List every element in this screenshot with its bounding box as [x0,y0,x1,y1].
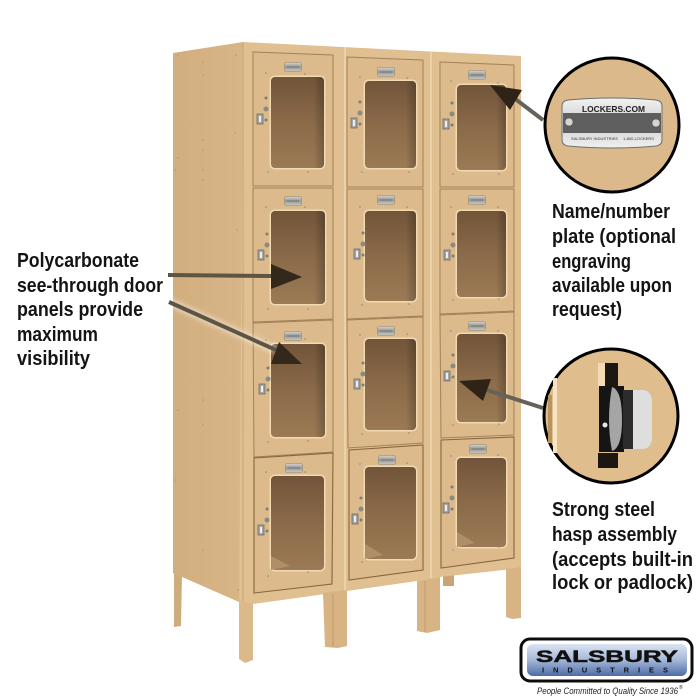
door 3-3 [440,312,514,438]
name plate detail: LOCKERS.COM [582,104,645,114]
locker unit [173,42,521,663]
logo: Salsbury Industries: SALSBURY [536,647,679,666]
column 2 doors [347,57,423,580]
door 1-4 [254,453,333,593]
arrow: door panel lower [169,302,302,364]
front frame [239,42,521,604]
text: polycarbonate panels: Polycarbonate [17,249,139,272]
text: name plate: plate (optional [552,225,676,248]
hasp detail [598,363,652,468]
logo: Salsbury Industries [521,639,692,697]
text: polycarbonate panels: visibility [17,347,91,370]
text: polycarbonate panels [17,249,163,370]
second leg [323,590,347,648]
text: name plate: available upon [552,274,672,297]
column 3 doors [440,62,514,568]
text: polycarbonate panels: maximum [17,323,98,346]
text: name plate [552,200,676,321]
door 2-1 [347,57,423,187]
rear inner leg [443,574,454,586]
rear left leg [174,570,182,627]
arrow: name plate [490,85,543,120]
text: name plate: engraving [552,250,631,273]
text: hasp: hasp assembly [552,523,678,546]
name plate detail: SALSBURY INDUSTRIES [571,137,619,141]
callout circle: hasp [544,349,678,483]
door 2-3 [347,317,423,448]
third leg [417,577,440,633]
logo: Salsbury Industries: INDUSTRIES [542,666,668,674]
door 2-4 [349,445,423,580]
callout circle: name plate [545,58,679,192]
door 1-1 [253,52,333,186]
door 3-1 [440,62,514,187]
front left leg [239,600,253,663]
door 1-3 [253,320,333,457]
door 1-2 [253,188,333,322]
name plate detail [562,98,662,148]
logo: Salsbury Industries: ® [679,684,683,691]
arrow: door panel upper [168,264,302,289]
text: hasp [552,498,693,594]
text: polycarbonate panels: see-through door [17,274,163,297]
text: name plate: Name/number [552,200,670,223]
arrow: hasp [459,379,543,408]
text: polycarbonate panels: panels provide [17,298,143,321]
text: hasp: Strong steel [552,498,655,521]
text: name plate: request) [552,298,622,321]
column 1 doors [253,52,333,593]
name plate detail: 1-800-LOCKERS [623,137,655,141]
door 3-2 [440,189,514,314]
door 2-2 [347,189,423,319]
right leg [506,567,521,619]
door 3-4 [441,437,514,568]
side panel [173,42,243,602]
